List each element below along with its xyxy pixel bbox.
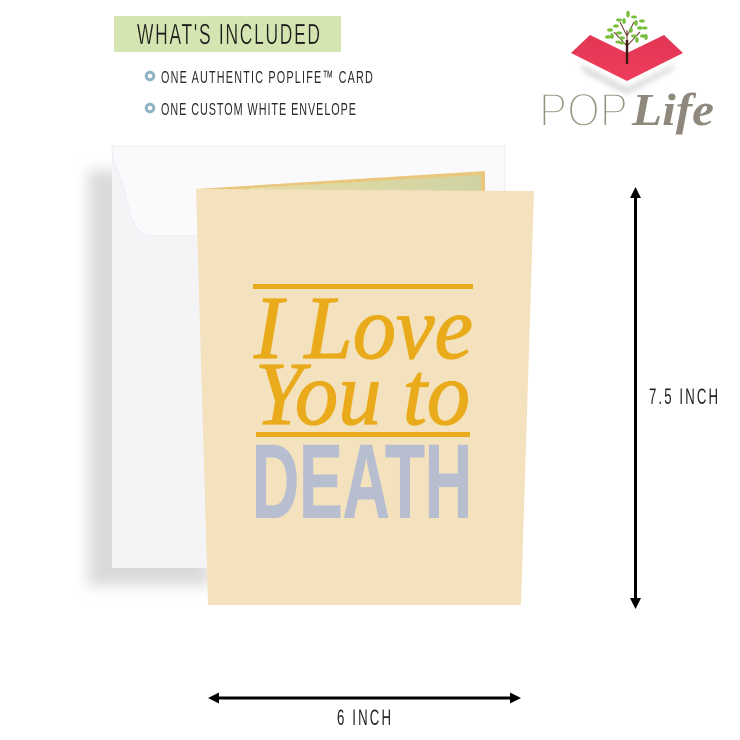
card front: [196, 189, 534, 605]
envelope: [88, 146, 505, 586]
envelope drop shadow: [88, 170, 210, 586]
logo: PopLife: [539, 10, 714, 136]
what's included heading: WHAT'S INCLUDED: [137, 19, 320, 51]
envelope flap: [112, 146, 505, 236]
included items list: ONE AUTHENTIC POPLIFE™ CARD: [161, 68, 373, 88]
logo tree: [605, 10, 648, 64]
logo wordmark POP: POP: [539, 83, 628, 136]
height arrow: [630, 187, 641, 609]
card text: DEATH: DEATH: [252, 424, 472, 540]
logo wordmark Life: Life: [631, 85, 714, 135]
included items list: [146, 68, 373, 120]
greeting card: [196, 171, 534, 605]
logo shadow: [580, 64, 675, 94]
envelope body: [112, 146, 505, 568]
width label: 6 INCH: [337, 706, 391, 730]
width arrow: [208, 692, 521, 704]
card back panel: [196, 171, 485, 192]
included items list: ONE CUSTOM WHITE ENVELOPE: [161, 100, 356, 120]
card inner page: [250, 175, 481, 192]
height label: 7.5 INCH: [649, 385, 718, 409]
top rule: [253, 284, 473, 289]
card text: I Love: I Love: [253, 279, 473, 378]
logo red book: [571, 35, 683, 81]
middle rule: [256, 432, 470, 437]
card text: You to: You to: [255, 345, 470, 444]
